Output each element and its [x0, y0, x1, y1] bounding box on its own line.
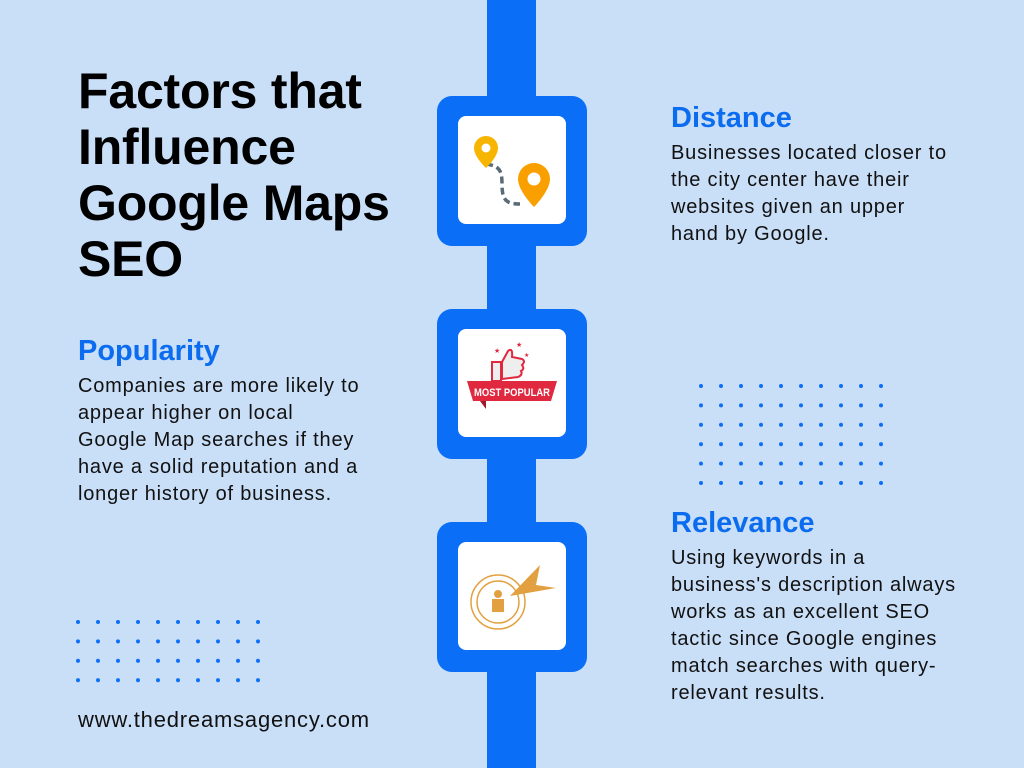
- text: popularity: Google Map searches if they: [78, 429, 354, 451]
- icon box: relevance: [437, 522, 587, 672]
- icon box: most popular: ★: [516, 341, 522, 349]
- icon box: most popular: MOST POPULAR: [474, 387, 550, 399]
- text: relevance: business's description always: [671, 574, 956, 596]
- text: popularity: appear higher on local: [78, 402, 294, 424]
- text: distance: hand by Google.: [671, 223, 830, 245]
- text: distance: [671, 142, 947, 245]
- vertical bar: [487, 0, 536, 768]
- text: relevance: tactic since Google engines: [671, 628, 937, 650]
- title: SEO: [78, 231, 183, 287]
- heading: distance: Distance: [671, 102, 792, 134]
- icon box: most popular: ★: [494, 347, 500, 355]
- text: popularity: Companies are more likely to: [78, 375, 359, 397]
- title: Factors that: [78, 63, 362, 119]
- text: popularity: longer history of business.: [78, 483, 332, 505]
- icon box: most popular: [437, 309, 587, 459]
- text: relevance: Using keywords in a: [671, 547, 865, 569]
- url: www.thedreamsagency.com: [78, 707, 370, 732]
- text: distance: Businesses located closer to: [671, 142, 947, 164]
- text: relevance: relevant results.: [671, 682, 826, 704]
- title: Influence: [78, 119, 296, 175]
- title: [78, 63, 390, 287]
- text: popularity: [78, 375, 359, 505]
- title: Google Maps: [78, 175, 390, 231]
- text: popularity: have a solid reputation and a: [78, 456, 358, 478]
- text: distance: websites given an upper: [671, 196, 905, 218]
- text: distance: the city center have their: [671, 169, 910, 191]
- text: relevance: match searches with query-: [671, 655, 936, 677]
- heading: relevance: Relevance: [671, 507, 814, 539]
- icon box: most popular: ★: [524, 352, 529, 359]
- text: relevance: works as an excellent SEO: [671, 601, 930, 623]
- heading: popularity: Popularity: [78, 335, 220, 367]
- text: relevance: [671, 547, 956, 704]
- icon box: distance: [437, 96, 587, 246]
